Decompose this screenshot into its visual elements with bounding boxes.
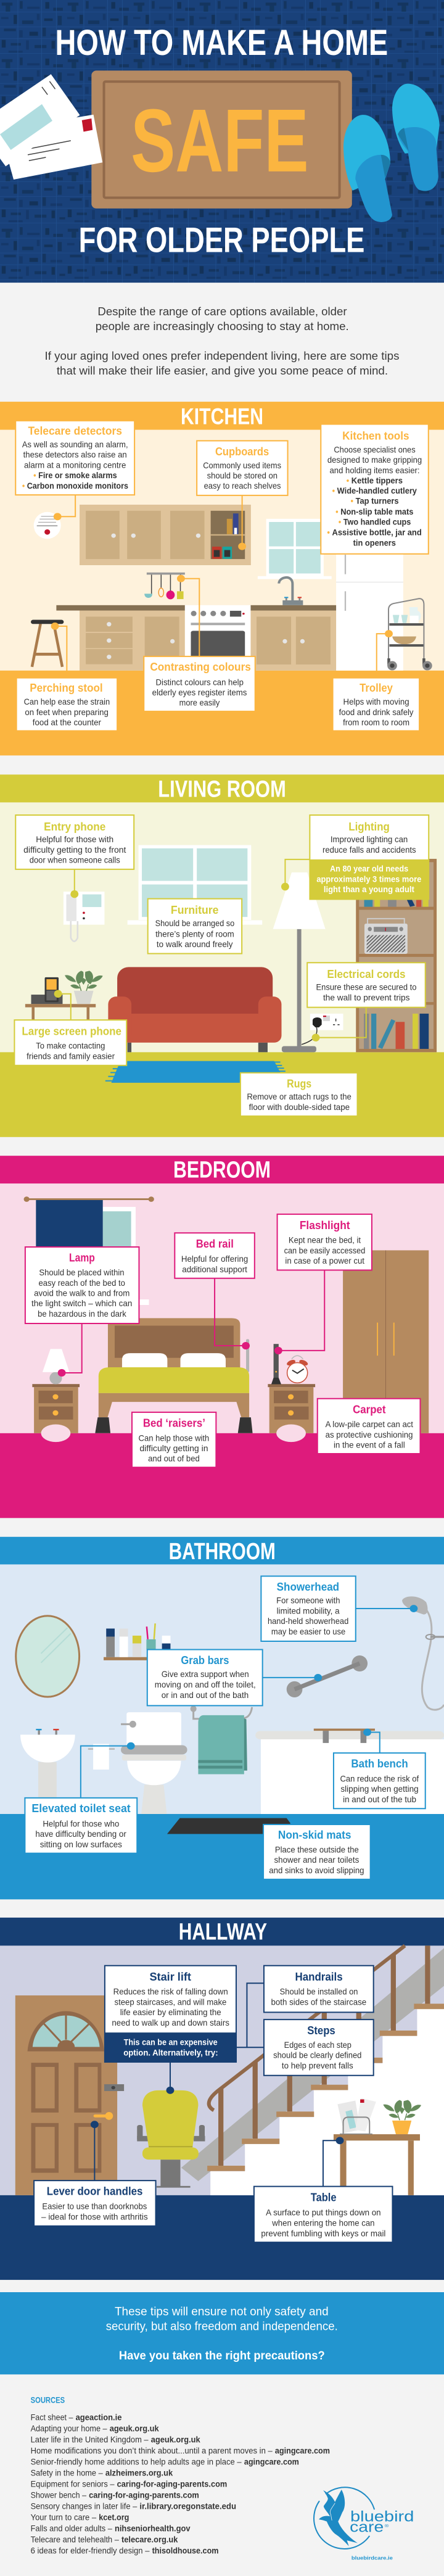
callout: showerhead: For someone with	[276, 1596, 340, 1605]
sources list: ir.library.oregonstate.edu	[139, 2502, 236, 2511]
connector lines	[81, 1609, 414, 1798]
callout: elevated toilet seat: Helpful for those who	[43, 1820, 119, 1829]
callout: steps: to help prevent falls	[282, 2061, 353, 2071]
callout: cupboards: should be stored on	[207, 471, 278, 481]
logo: bluebird care: care	[350, 2519, 384, 2535]
callout: grab bars: or in and out of the bath	[162, 1691, 249, 1700]
callout: contrasting colours	[144, 656, 255, 711]
callout: lever door handles: Lever door handles	[47, 2185, 142, 2198]
callout: bath bench	[334, 1753, 426, 1808]
callout: stair lift: need to walk up and down stairs	[112, 2018, 229, 2028]
callout: elevated toilet seat: Elevated toilet seat	[31, 1803, 131, 1815]
callout: lighting: Improved lighting can	[331, 835, 408, 845]
sources list: telecare.org.uk	[121, 2535, 178, 2545]
closing text	[106, 2305, 338, 2362]
callout: kitchen tools: • Two handled cups	[339, 518, 411, 527]
bedroom wall top	[0, 1183, 444, 1203]
callout: lighting: approximately 3 times more	[316, 875, 421, 884]
connector lines	[55, 495, 388, 678]
callout: carpet: Carpet	[353, 1404, 385, 1416]
callout: non-skid mats: Non-skid mats	[278, 1829, 351, 1842]
icon: sink	[20, 1729, 75, 1814]
callout: elevated toilet seat: sitting on low surfaces	[40, 1840, 122, 1850]
callout: lamp: Lamp	[69, 1252, 95, 1264]
callout: steps: should be clearly defined	[273, 2051, 361, 2060]
icon: smoke detector	[34, 512, 61, 539]
callout: entry phone: difficulty getting to the front	[23, 845, 126, 855]
sources list: thisoldhouse.com	[152, 2546, 219, 2556]
callout: trolley: Trolley	[360, 682, 393, 695]
callout: bed raisers: and out of bed	[148, 1454, 200, 1464]
callout: lever door handles	[34, 2180, 156, 2226]
window	[258, 519, 332, 579]
callout: stair lift: option. Alternatively, try:	[123, 2048, 218, 2058]
panel: closing and sources	[0, 2292, 444, 2561]
sources list: agingcare.com	[244, 2458, 299, 2467]
intro text: If your aging loved ones prefer independent living, here are some tips	[45, 350, 399, 363]
callout: cupboards: Cupboards	[215, 445, 269, 458]
callout: bed rail: Helpful for offering	[181, 1254, 248, 1264]
callout: kitchen tools: and holding items easier:	[330, 466, 420, 476]
callout: showerhead: hand-held showerhead	[268, 1617, 348, 1626]
icon: radio	[364, 919, 408, 954]
callout: electrical cords: the wall to prevent trips	[323, 993, 409, 1003]
callout: entry phone: Entry phone	[44, 820, 105, 833]
wardrobe	[343, 1250, 429, 1433]
heading: BATHROOM	[169, 1538, 276, 1564]
callout: flashlight: Kept near the bed, it	[289, 1235, 361, 1245]
callout: perching stool: on feet when preparing	[25, 708, 109, 717]
sources list: Telecare and telehealth –	[31, 2535, 120, 2545]
callout: stair lift: life easier by eliminating the	[120, 2008, 221, 2018]
callout: showerhead: Showerhead	[277, 1581, 339, 1594]
closing text: security, but also freedom and independence.	[106, 2319, 338, 2332]
callout: lamp: the light switch – which can	[31, 1299, 132, 1309]
callout: lamp: avoid the walk to and from	[34, 1288, 130, 1298]
callout: showerhead	[261, 1576, 356, 1641]
callout: kitchen tools: • Kettle tippers	[347, 476, 403, 486]
intro text: people are increasingly choosing to stay at home.	[96, 321, 349, 333]
callout: lighting: reduce falls and accidents	[323, 845, 416, 855]
callout: kitchen tools: tin openers	[353, 538, 396, 548]
callout: perching stool: food at the counter	[33, 718, 101, 727]
callout: large screen phone: friends and family easier	[27, 1052, 115, 1061]
callout: entry phone: Helpful for those with	[36, 835, 113, 845]
sources list: Your turn to care –	[31, 2513, 97, 2522]
icon: perching stool	[31, 620, 64, 667]
floor	[0, 1814, 444, 1899]
icon: staircase	[181, 1945, 444, 2195]
closing text: Have you taken the right precautions?	[119, 2349, 325, 2362]
callout: showerhead: may be easier to use	[271, 1627, 345, 1637]
callout: electrical cords	[307, 963, 426, 1008]
icon: slippers	[343, 84, 440, 222]
callout: stair lift: steep staircases, and will make	[115, 1997, 226, 2007]
callout: lamp: easy reach of the bed to	[38, 1278, 125, 1288]
callout: handrails	[264, 1966, 374, 2012]
icon: trolley	[387, 598, 432, 670]
callout: furniture	[148, 899, 242, 954]
connector lines	[58, 859, 366, 1038]
icon: bookcase	[356, 859, 437, 1052]
callout: grab bars: Grab bars	[181, 1655, 229, 1667]
sources list: ageaction.ie	[76, 2413, 121, 2422]
sources list: 6 ideas for elder-friendly design –	[31, 2546, 150, 2556]
sources list: Sensory changes in later life –	[31, 2502, 138, 2511]
logo: bluebird care	[314, 2487, 414, 2561]
icon: stair lift	[137, 2090, 205, 2188]
oven	[185, 605, 250, 671]
sources list: nihseniorhealth.gov	[115, 2524, 191, 2533]
callout: flashlight: Flashlight	[300, 1220, 350, 1232]
logo: bluebird care: ®	[385, 2524, 388, 2528]
callout: flashlight: can be easily accessed	[284, 1246, 365, 1256]
icon: socket and plug	[302, 1014, 343, 1045]
icon: entry phone	[64, 892, 104, 942]
callout: contrasting colours: more easily	[179, 698, 220, 708]
callout: lever door handles: – ideal for those with arthritis	[41, 2212, 148, 2222]
sources list: ageuk.org.uk	[110, 2424, 159, 2433]
icon: phone on table with plant	[25, 971, 103, 1020]
bedroom heading: BEDROOM	[173, 1157, 271, 1183]
callout: entry phone: door when someone calls	[30, 856, 120, 866]
callout: rugs: Remove or attach rugs to the	[247, 1092, 352, 1102]
callout: trolley: from room to room	[343, 718, 409, 727]
hanging utensils	[144, 573, 185, 599]
icon: bath with bench	[255, 1729, 444, 1814]
floor	[0, 671, 444, 755]
sources list: Shower bench –	[31, 2491, 87, 2500]
icon: grab bar	[287, 1655, 368, 1697]
callout: bed raisers: Can help those with	[139, 1433, 209, 1443]
icon: hall table with mail and plant	[334, 2098, 421, 2195]
callout: carpet	[318, 1399, 420, 1454]
panel: living room	[0, 774, 444, 1203]
callout: steps	[264, 2019, 374, 2076]
callout: trolley: food and drink safely	[339, 708, 414, 717]
connector lines	[62, 1270, 324, 1373]
tap	[279, 578, 303, 605]
callout: steps: Edges of each step	[284, 2040, 352, 2050]
sources list: Senior-friendly home additions to help adults age in place –	[31, 2458, 242, 2467]
panel: bathroom	[0, 1537, 444, 1899]
icon: toilet paper	[88, 1744, 115, 1770]
callout: table: A surface to put things down on	[266, 2208, 381, 2218]
icon: sofa	[108, 967, 281, 1052]
callout: kitchen tools: designed to make gripping	[327, 455, 422, 465]
callout: rugs: floor with double-sided tape	[249, 1103, 350, 1112]
callout: steps: Steps	[307, 2024, 335, 2037]
callout: non-skid mats: Place these outside the	[275, 1845, 359, 1855]
floor	[0, 2195, 444, 2280]
callout: perching stool	[17, 678, 117, 731]
callout: furniture: Should be arranged so	[155, 919, 234, 929]
callout: bed raisers: difficulty getting in	[139, 1444, 208, 1454]
callout: kitchen tools	[321, 424, 429, 554]
callout: lamp: Should be placed within	[39, 1268, 125, 1278]
callout: lighting: light than a young adult	[324, 885, 414, 895]
callout: contrasting colours: Contrasting colours	[150, 661, 251, 674]
callout: lamp	[25, 1247, 139, 1323]
connector dots	[58, 1342, 282, 1377]
callout: grab bars: Give extra support when	[162, 1670, 249, 1679]
callout: handrails: Handrails	[295, 1971, 343, 1984]
right nightstand with flashlight and clock	[268, 1344, 315, 1442]
callout: bed raisers	[132, 1412, 216, 1467]
worktop and base cabinets	[56, 605, 336, 671]
callout: lighting	[309, 815, 429, 900]
panel: hallway	[0, 1918, 444, 2280]
callout: bath bench: Can reduce the risk of	[340, 1774, 419, 1784]
connector dots	[54, 883, 319, 1042]
sources list: Falls and older adults –	[31, 2524, 112, 2533]
upper cabinets	[80, 505, 251, 565]
heading band	[0, 402, 444, 430]
connector lines	[94, 1983, 340, 2187]
sources list: Fact sheet –	[31, 2413, 73, 2422]
callout: rugs	[240, 1073, 358, 1116]
sources list: kcet.org	[99, 2513, 129, 2522]
closing text: These tips will ensure not only safety and	[115, 2305, 329, 2317]
callout: rugs: Rugs	[287, 1077, 311, 1090]
callout: carpet: as protective cushioning	[326, 1430, 413, 1439]
callout: lever door handles: Easier to use than doorknobs	[42, 2201, 147, 2211]
callout: kitchen tools: • Assistive bottle, jar and	[327, 528, 422, 537]
sources list: Safety in the home –	[31, 2469, 103, 2478]
heading: HALLWAY	[179, 1918, 267, 1945]
icon: mirror	[16, 1616, 80, 1697]
bedroom heading band	[0, 1156, 444, 1183]
sources list	[31, 2413, 330, 2556]
logo: bluebird care: bluebirdcare.ie	[352, 2556, 393, 2561]
fridge	[336, 553, 403, 671]
callout: trolley: Helps with moving	[343, 697, 409, 706]
callout: telecare detectors: alarm at a monitoring centre	[24, 461, 126, 470]
callout: contrasting colours: elderly eyes register items	[152, 688, 247, 698]
callout: stair lift: Stair lift	[149, 1971, 191, 1984]
callout: grab bars: moving on and off the toilet,	[155, 1680, 256, 1690]
callout: kitchen tools: • Tap turners	[350, 497, 399, 506]
closing band	[0, 2292, 444, 2374]
callout: showerhead: limited mobility, a	[277, 1606, 340, 1616]
callout: kitchen tools: Kitchen tools	[342, 430, 409, 442]
callout: bed raisers: Bed ‘raisers’	[143, 1417, 205, 1430]
callout: large screen phone: To make contacting	[36, 1042, 105, 1051]
callout: perching stool: Can help ease the strain	[24, 697, 110, 706]
callout: lamp: be hazardous in the dark	[38, 1309, 127, 1319]
callout: non-skid mats: and sinks to avoid slipping	[269, 1866, 364, 1876]
callout: telecare detectors: Telecare detectors	[28, 425, 122, 437]
callout: lighting: Lighting	[348, 820, 390, 833]
intro text: that will make their life easier, and give you some peace of mind.	[57, 365, 388, 378]
callout: entry phone	[15, 815, 134, 869]
callout: kitchen tools: Choose specialist ones	[334, 445, 416, 455]
callout: contrasting colours: Distinct colours can help	[156, 678, 244, 687]
connector dots	[91, 2087, 343, 2144]
callout: bath bench: slipping when getting	[340, 1784, 419, 1794]
callout: trolley	[333, 678, 419, 731]
callout: bath bench: Bath bench	[351, 1758, 408, 1770]
icon: front door	[15, 1995, 124, 2195]
callout: electrical cords: Ensure these are secured to	[316, 983, 417, 992]
heading band	[0, 1537, 444, 1564]
heading band	[0, 774, 444, 802]
icon: non-skid mat	[167, 1818, 290, 1834]
callout: bed rail: additional support	[182, 1265, 247, 1274]
callout: telecare detectors: • Carbon monoxide monitors	[22, 481, 128, 491]
callout: furniture: Furniture	[171, 903, 219, 916]
logo: bluebird care: bluebird	[350, 2509, 414, 2525]
connector dots	[127, 1605, 417, 1750]
icon: door mat	[91, 70, 352, 209]
callout: telecare detectors: As well as sounding an alarm,	[22, 440, 128, 450]
callout: table: prevent fumbling with keys or mail	[261, 2229, 385, 2238]
callout: carpet: A low-pile carpet can act	[326, 1420, 413, 1430]
shelf with toiletries	[104, 1623, 170, 1660]
floor	[0, 1433, 444, 1518]
panel: hero header	[0, 0, 444, 378]
sources list: caring-for-aging-parents.com	[89, 2491, 199, 2500]
intro text	[45, 306, 399, 378]
callout: table	[254, 2187, 392, 2242]
callout: non-skid mats	[263, 1824, 371, 1879]
callout: table: Table	[311, 2192, 337, 2204]
panel: kitchen	[0, 402, 444, 755]
sources list: Equipment for seniors –	[31, 2480, 115, 2489]
left nightstand with lamp	[32, 1349, 80, 1442]
heading: KITCHEN	[181, 404, 263, 429]
callout: electrical cords: Electrical cords	[327, 967, 406, 980]
callout: telecare detectors: these detectors also raise an	[23, 450, 127, 460]
intro text: Despite the range of care options available, older	[97, 306, 347, 318]
callout: handrails: both sides of the staircase	[271, 1997, 366, 2007]
callout: furniture: there’s plenty of room	[155, 929, 234, 939]
icon: rug	[105, 1061, 286, 1083]
callout: stair lift	[104, 1966, 237, 2063]
sources list: Home modifications you don’t think about...until a parent moves in –	[31, 2446, 273, 2456]
sources list: agingcare.com	[275, 2446, 330, 2456]
sources list: Later life in the United Kingdom –	[31, 2435, 149, 2445]
connector dots	[51, 513, 393, 637]
heading: LIVING ROOM	[158, 776, 286, 802]
callout: cupboards: easy to reach shelves	[204, 481, 281, 491]
heading band	[0, 1918, 444, 1945]
icon: shower	[402, 1596, 444, 1710]
callout: cupboards	[197, 441, 288, 495]
callout: perching stool: Perching stool	[30, 682, 103, 695]
callout: table: when entering the home can	[271, 2218, 375, 2228]
callout: large screen phone: Large screen phone	[22, 1025, 121, 1038]
floor	[0, 1052, 444, 1137]
callout: elevated toilet seat	[25, 1798, 137, 1853]
sources heading: SOURCES	[31, 2396, 65, 2405]
icon: toilet	[121, 1712, 187, 1814]
callout: carpet: in the event of a fall	[334, 1441, 405, 1450]
sources list: alzheimers.org.uk	[105, 2469, 173, 2478]
sources list: caring-for-aging-parents.com	[117, 2480, 227, 2489]
callout: telecare detectors: • Fire or smoke alarms	[33, 471, 117, 481]
window and curtain	[24, 1196, 154, 1305]
icon: bed	[95, 1318, 253, 1433]
icon: towel	[191, 1705, 252, 1775]
callout: bath bench: in and out of the tub	[343, 1795, 416, 1805]
callout: lighting: An 80 year old needs	[330, 864, 408, 874]
callout: handrails: Should be installed on	[280, 1987, 358, 1997]
panel: bedroom	[0, 1196, 444, 1518]
callout: stair lift: Reduces the risk of falling down	[113, 1987, 228, 1997]
sources list: Adapting your home –	[31, 2424, 107, 2433]
sources list: ageuk.org.uk	[151, 2435, 200, 2445]
callout: flashlight: in case of a power cut	[285, 1256, 364, 1266]
window	[128, 845, 262, 925]
callout: non-skid mats: shower and near toilets	[274, 1855, 359, 1865]
callout: bed rail	[175, 1233, 255, 1278]
callout: grab bars	[147, 1649, 263, 1705]
callout: cupboards: Commonly used items	[203, 461, 281, 471]
callout: large screen phone	[14, 1020, 126, 1066]
icon: floor lamp	[273, 872, 326, 1052]
callout: furniture: to walk around freely	[157, 940, 233, 950]
callout: kitchen tools: • Wide-handled cutlery	[332, 486, 417, 496]
icon: door mat: SAFE	[131, 91, 309, 191]
icon: envelopes	[0, 74, 102, 180]
callout: telecare detectors	[15, 421, 134, 495]
callout: kitchen tools: • Non-slip table mats	[335, 507, 413, 517]
callout: elevated toilet seat: have difficulty bending or	[35, 1829, 126, 1839]
callout: flashlight	[278, 1214, 372, 1270]
callout: stair lift: This can be an expensive	[124, 2038, 218, 2047]
callout: bed rail: Bed rail	[196, 1238, 234, 1250]
